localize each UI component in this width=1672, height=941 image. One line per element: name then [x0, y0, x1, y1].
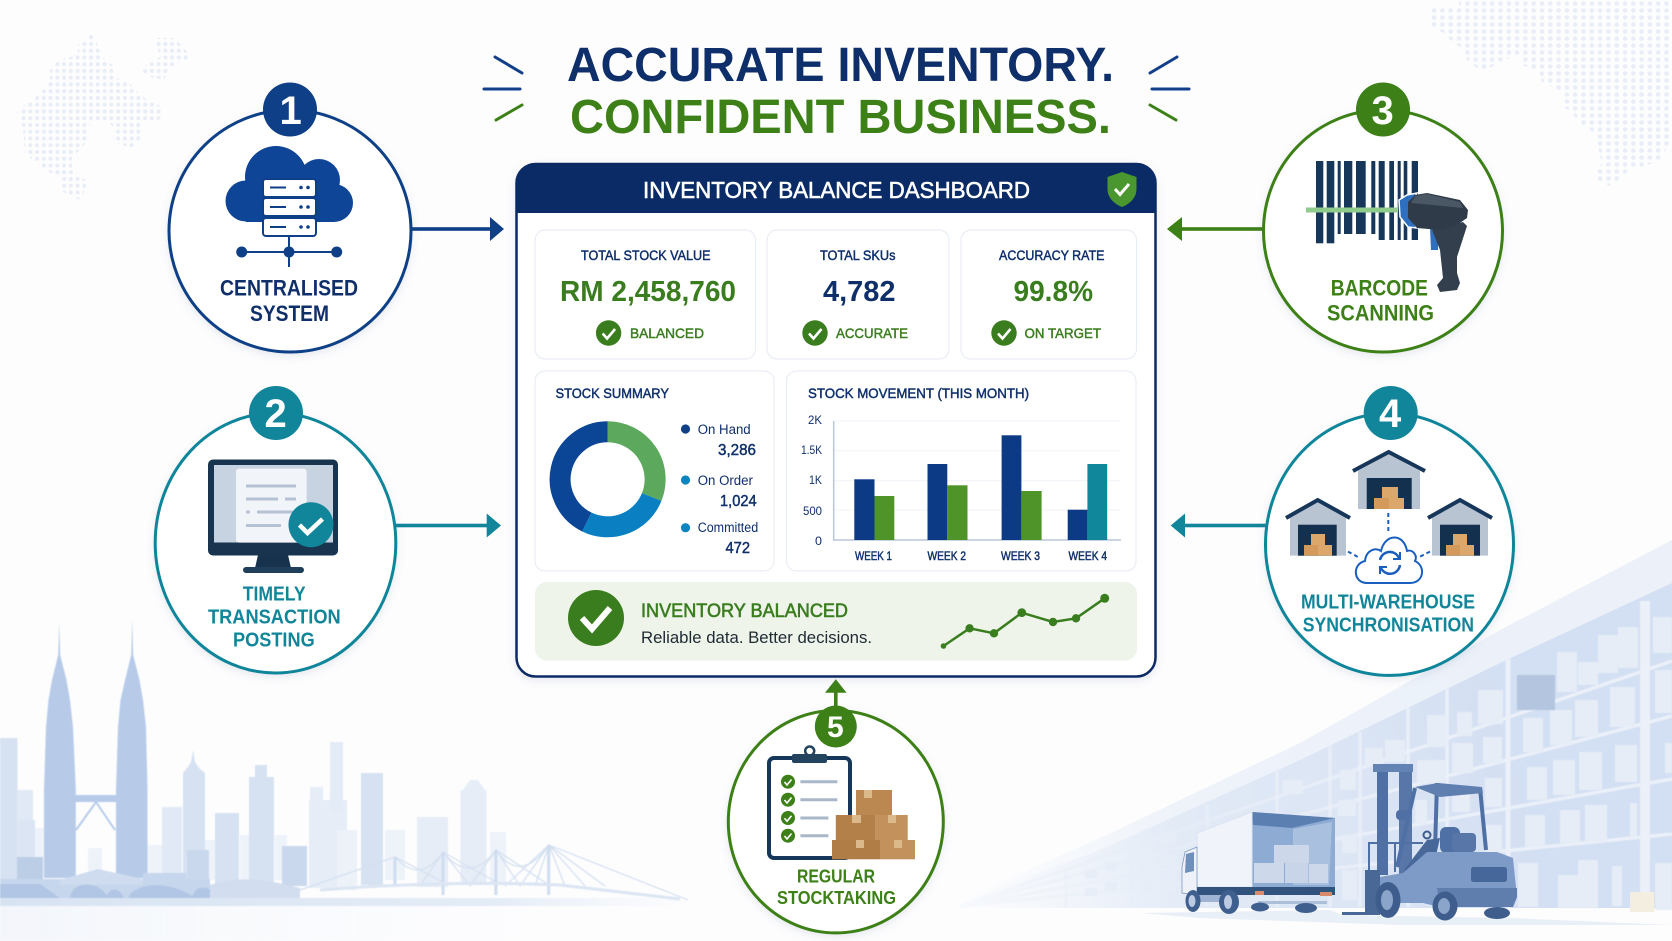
donut legend [681, 422, 758, 557]
step 5: regular stocktaking [728, 706, 943, 933]
arrow: step 3 to dashboard [1167, 217, 1264, 241]
bar chart: WEEK 2 [928, 549, 966, 563]
KPI card: accuracy rate: ON TARGET [1024, 325, 1101, 341]
arrow: step 1 to dashboard [410, 217, 504, 241]
donut chart [560, 432, 655, 527]
warehouse illustration [950, 540, 1672, 925]
KPI card: accuracy rate: 99.8% [1014, 276, 1093, 308]
KPI card: total SKUs [767, 230, 949, 359]
bar chart: 500 [803, 504, 822, 518]
badge 5 [815, 706, 857, 748]
banner: inventory balanced: Reliable data. Better decisions. [641, 628, 872, 647]
badge 3 [1356, 82, 1410, 136]
bar chart: WEEK 1 [855, 549, 892, 563]
badge 4 [1364, 386, 1418, 440]
arrow: step 2 to dashboard [395, 514, 501, 538]
badge 1 [263, 82, 317, 136]
icon: right warehouse [1428, 500, 1492, 556]
dotted map: left [17, 32, 188, 200]
step 1: centralised system: CENTRALISED [220, 275, 358, 300]
arrow: step 5 to dashboard [825, 679, 847, 709]
panel: stock summary [535, 371, 774, 571]
banner: inventory balanced [535, 582, 1137, 661]
KPI card: accuracy rate [961, 230, 1136, 359]
icon: top warehouse [1353, 452, 1425, 509]
step 3: barcode scanning: SCANNING [1327, 300, 1434, 325]
icon: monitor with document [208, 460, 338, 573]
forklift [1342, 764, 1517, 920]
KPI card: total SKUs: TOTAL SKUs [820, 248, 896, 263]
banner: inventory balanced: INVENTORY BALANCED [641, 600, 848, 622]
step 2: timely transaction posting: TIMELY [243, 583, 306, 606]
badge 2 [249, 386, 303, 440]
stored boxes [1085, 617, 1672, 910]
bar chart: WEEK 3 [1001, 549, 1040, 563]
bar chart: WEEK 4 [1068, 549, 1107, 563]
bar chart: 1.5K [801, 443, 822, 457]
badge 1: 1 [280, 89, 302, 133]
step 4: multi-warehouse synchronisation [1266, 386, 1514, 675]
donut legend: 1,024 [720, 493, 757, 510]
title accent lines: left [484, 57, 522, 120]
KPI card: total SKUs: ACCURATE [836, 325, 908, 341]
floor cream box [1630, 892, 1654, 912]
donut legend: Committed [698, 520, 758, 535]
icon: barcode scanner [1306, 161, 1468, 292]
panel: stock movement: STOCK MOVEMENT (THIS MONTH) [808, 385, 1029, 401]
title [567, 39, 1114, 144]
donut legend: On Hand [698, 422, 751, 437]
dotted map: right [1429, 0, 1672, 187]
panel: inventory balance dashboard [516, 164, 1156, 676]
Petronas twin towers [44, 620, 148, 878]
step 1: centralised system: SYSTEM [250, 301, 329, 326]
racking [960, 601, 1672, 907]
icon: stacked boxes [832, 790, 915, 859]
badge 2: 2 [264, 392, 287, 436]
sparkline [941, 594, 1109, 649]
donut legend: 3,286 [718, 442, 756, 459]
KPI card: total stock value: BALANCED [630, 325, 704, 341]
step 2: timely transaction posting: TRANSACTION [208, 606, 341, 629]
icon: shield check [1108, 172, 1136, 207]
step 4: multi-warehouse synchronisation: MULTI-WAREHOUSE [1301, 592, 1475, 614]
step 5: regular stocktaking: REGULAR [797, 867, 875, 887]
title accent lines: right [1150, 57, 1189, 120]
step 2: timely transaction posting [155, 386, 396, 673]
step 3: barcode scanning [1264, 82, 1502, 352]
foreground foliage band [0, 869, 300, 898]
donut legend: On Order [698, 473, 753, 488]
bar chart: 0 [815, 534, 822, 548]
suspension bridge [300, 845, 688, 900]
bar chart: 2K [808, 413, 822, 427]
title: CONFIDENT BUSINESS. [570, 91, 1111, 144]
bar chart [801, 413, 1121, 563]
step 3: barcode scanning: BARCODE [1331, 275, 1428, 300]
badge 3: 3 [1372, 89, 1394, 133]
step 5: regular stocktaking: STOCKTAKING [777, 888, 896, 908]
icon: sync cloud [1348, 513, 1430, 583]
panel: stock summary: STOCK SUMMARY [556, 385, 670, 401]
truck [1182, 812, 1335, 914]
arrow: step 4 to dashboard [1171, 514, 1266, 538]
badge 5: 5 [827, 711, 844, 744]
dashboard heading: INVENTORY BALANCE DASHBOARD [643, 177, 1030, 203]
title: ACCURATE INVENTORY. [567, 39, 1114, 92]
KPI card: total SKUs: 4,782 [823, 276, 896, 308]
badge 4: 4 [1379, 392, 1402, 436]
donut legend: 472 [726, 540, 750, 557]
dashboard header bar [516, 164, 1156, 213]
icon: clipboard checklist [769, 746, 850, 858]
step 1: centralised system [169, 82, 411, 352]
icon: cloud server [226, 146, 353, 267]
step 2: timely transaction posting: POSTING [233, 628, 315, 652]
city skyline illustration [0, 620, 700, 941]
panel: stock movement [786, 371, 1136, 571]
KPI card: total stock value: TOTAL STOCK VALUE [581, 248, 710, 263]
step 4: multi-warehouse synchronisation: SYNCHRONISATION [1303, 614, 1474, 636]
KPI card: total stock value: RM 2,458,760 [560, 276, 736, 308]
KPI card: total stock value [535, 230, 756, 359]
floor shadow [1140, 910, 1672, 925]
bar chart: 1K [809, 473, 822, 487]
KPI card: accuracy rate: ACCURACY RATE [999, 248, 1104, 263]
icon: left warehouse [1286, 500, 1350, 556]
